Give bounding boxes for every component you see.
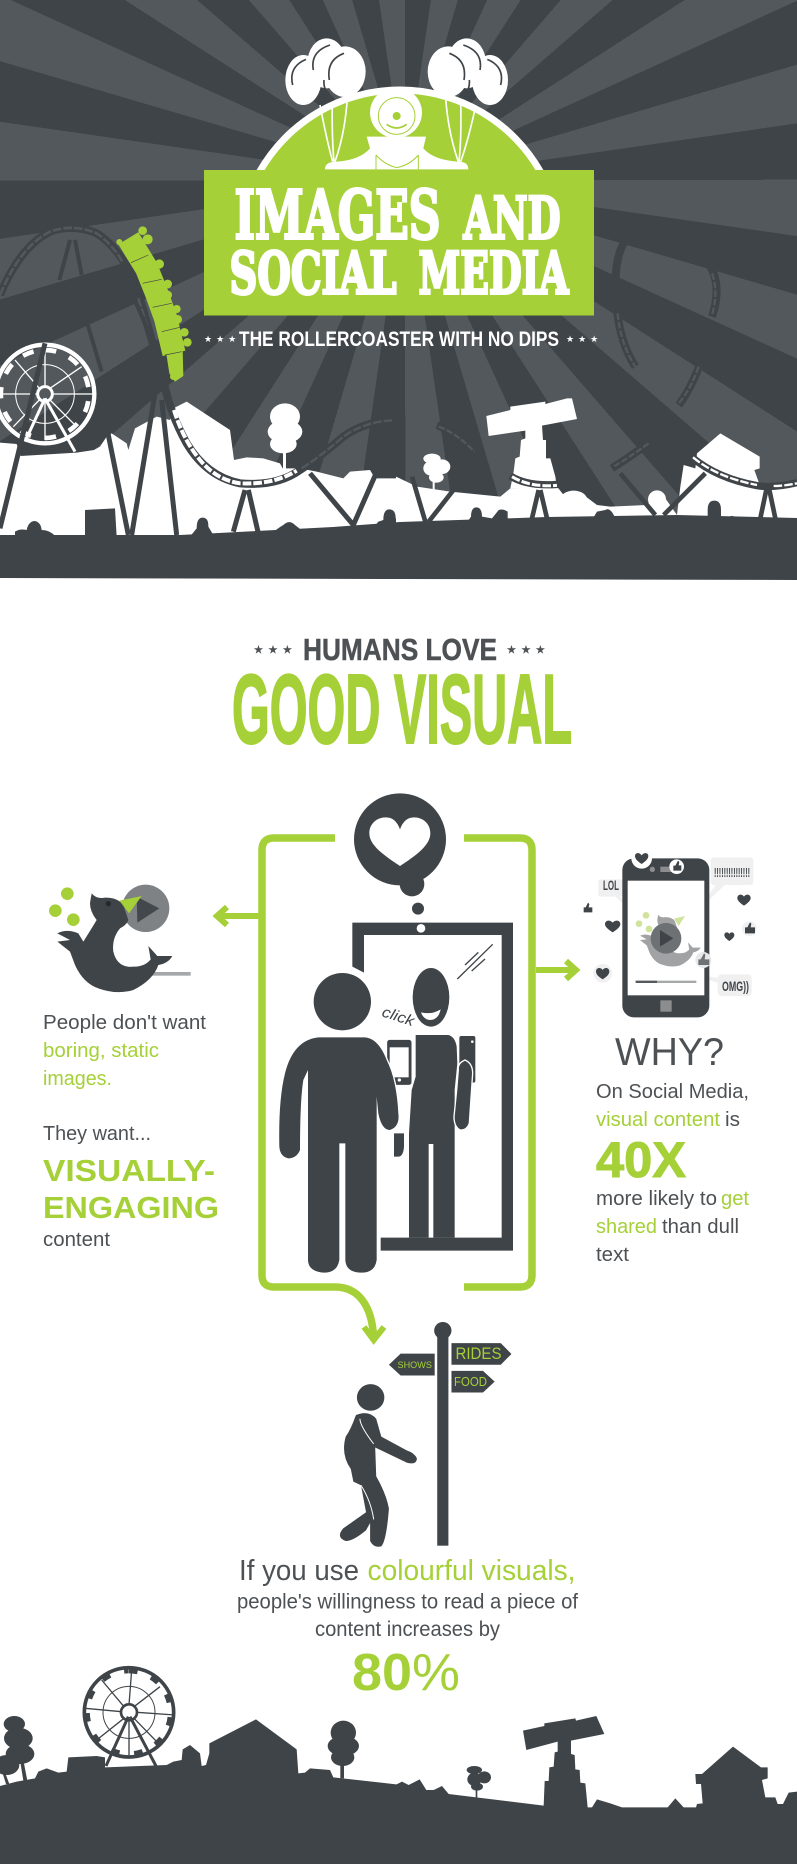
track with dashes [510, 457, 797, 487]
balloon strings [320, 98, 476, 162]
bottom text block: 80% [352, 1644, 460, 1702]
right coaster scene [394, 243, 797, 528]
seal icon [49, 885, 191, 992]
right text block: WHY? [615, 1031, 724, 1074]
left text block: ENGAGING [43, 1190, 219, 1225]
title line 2: SOCIAL [230, 240, 396, 308]
left text block: images. [43, 1068, 112, 1090]
telescope ride [486, 398, 577, 488]
phone icon [584, 848, 757, 1017]
left text block: boring, static [43, 1040, 159, 1062]
right text block: is [725, 1109, 740, 1131]
left text block: They want... [43, 1123, 151, 1145]
heading: humans love: ★★★ [507, 645, 550, 656]
phone bubble labels: OMG)) [722, 978, 749, 994]
right text block: shared [596, 1216, 657, 1238]
bottom text block: people's willingness to read a piece of [237, 1590, 578, 1614]
right text block: more likely to [596, 1188, 717, 1210]
right text block [596, 1031, 749, 1266]
play ball [122, 885, 169, 932]
left text block [43, 1012, 219, 1251]
title panel [204, 170, 594, 316]
sign labels: SHOWS [398, 1360, 432, 1370]
phone bubble labels [603, 865, 750, 994]
click label: click [380, 1004, 418, 1031]
title panel: AND [463, 184, 560, 252]
mirror and people illustration [279, 793, 513, 1273]
juggling balls [49, 887, 80, 926]
supports [412, 460, 775, 522]
ferris wheel [84, 1668, 175, 1766]
header ground band [0, 515, 797, 580]
bottom text block: colourful visuals, [368, 1555, 576, 1587]
right text block: On Social Media, [596, 1081, 749, 1103]
bottom skyline left [0, 1668, 402, 1864]
reflection figure [394, 968, 475, 1238]
balloons and clown mascot [285, 38, 508, 169]
left text block: People don't want [43, 1012, 206, 1034]
tree [268, 403, 302, 470]
left coaster scene [0, 226, 400, 542]
party hat [119, 896, 142, 913]
coaster track [0, 228, 400, 484]
hearts and thumbs [584, 848, 755, 979]
small tree [467, 1766, 491, 1798]
ferris wheel [0, 345, 95, 452]
phone bubble labels: !!!!!!!!!!!!!!! [714, 865, 750, 880]
sign labels: FOOD [454, 1375, 487, 1389]
man figure [279, 969, 412, 1273]
seal body [57, 893, 172, 992]
sign labels [398, 1345, 502, 1389]
coaster train [116, 226, 192, 382]
right text block: get [721, 1188, 749, 1210]
title panel: MEDIA [418, 240, 569, 308]
right text block: than dull [662, 1216, 739, 1238]
ground bumps [15, 508, 400, 537]
phone body [622, 858, 709, 1017]
mini seal video [636, 912, 701, 967]
bottom text block [237, 1555, 578, 1702]
right text block: 40X [596, 1132, 686, 1188]
phone bubble labels: LOL [603, 877, 619, 893]
signpost [389, 1322, 511, 1546]
logo dome [256, 38, 544, 171]
trees [0, 1716, 359, 1784]
ground bumps [465, 501, 737, 525]
header sunburst background [0, 0, 797, 576]
heading: humans love: ★★★ [254, 645, 297, 656]
dome [256, 87, 544, 171]
left text block: VISUALLY- [43, 1153, 215, 1188]
green box [204, 170, 594, 316]
subtitle: THE ROLLERCOASTER WITH NO DIPS [239, 328, 559, 351]
balloon highlights [292, 45, 502, 92]
title line 1: IMAGES [234, 176, 440, 254]
upper loop track [394, 243, 717, 468]
mirror frame [352, 923, 513, 1251]
small tree and ball bush [423, 454, 666, 508]
walking person [340, 1384, 417, 1547]
subtitle: ★★★ [566, 335, 602, 345]
mascot [370, 87, 422, 138]
white park silhouette left [0, 402, 400, 542]
white park silhouette right [396, 433, 797, 528]
green bracket and arrows [217, 838, 576, 1340]
heading: humans love: HUMANS LOVE [303, 632, 497, 667]
sign labels: RIDES [456, 1345, 502, 1363]
bottom text block: content increases by [315, 1618, 500, 1641]
right text block: text [596, 1244, 629, 1266]
speech bubbles [593, 857, 757, 996]
left text block: content [43, 1229, 110, 1251]
coaster supports [0, 240, 397, 535]
bottom text block: If you use [239, 1555, 359, 1587]
progress bar [636, 981, 696, 983]
right text block: visual content [596, 1109, 720, 1131]
bottom skyline right [395, 1716, 797, 1864]
balloons [285, 38, 508, 105]
subtitle: ★★★ [204, 335, 240, 345]
thought bubble heart [354, 793, 446, 915]
